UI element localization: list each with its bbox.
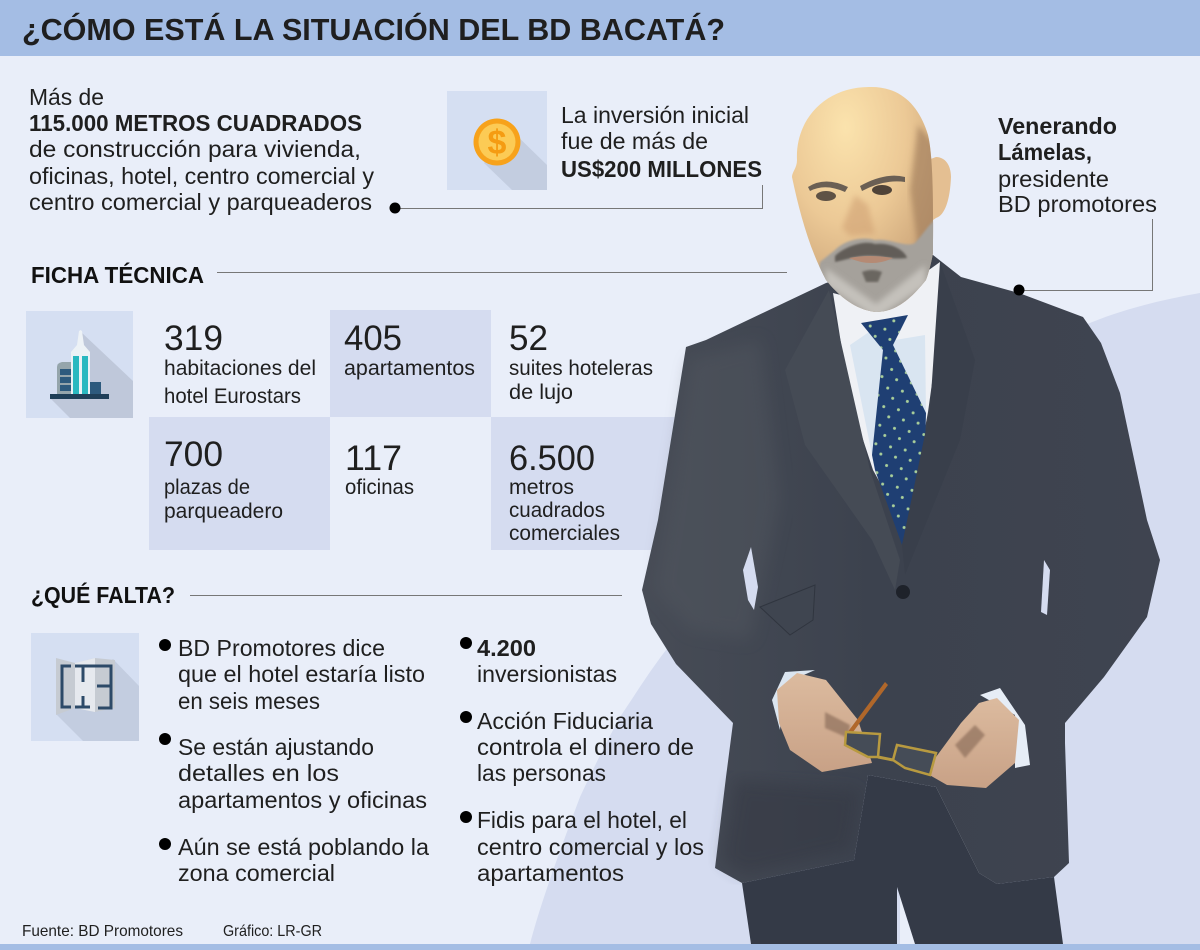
cell: 700 <box>149 417 330 550</box>
background shape: left curve <box>530 600 900 944</box>
text block: construction area <box>29 84 374 215</box>
bullet: fiduciary: Acción Fiduciaria <box>477 708 653 734</box>
title: ¿CÓMO ESTÁ LA SITUACIÓN DEL BD BACATÁ? <box>22 11 725 47</box>
nose <box>842 195 875 236</box>
tie <box>861 315 926 545</box>
text block: initial investment <box>561 102 762 182</box>
title <box>0 0 1200 56</box>
stat: 52 suites: 52 <box>509 319 548 358</box>
cuffs <box>772 670 815 730</box>
stat: 700 parking <box>164 435 283 523</box>
list: right column <box>460 635 704 886</box>
bullet: fidis: centro comercial y los <box>477 834 704 860</box>
icon: building <box>26 311 133 418</box>
bullet: investors: 4.200 <box>477 635 536 661</box>
bullet: hotel: en seis meses <box>178 688 320 714</box>
leader line: investment <box>390 185 762 214</box>
bullet: apartments: apartamentos y oficinas <box>178 787 427 813</box>
text block: construction area: oficinas, hotel, centro comercial y <box>29 163 374 189</box>
lapels <box>785 290 900 590</box>
stat: 52 suites <box>509 319 653 404</box>
bullet: hotel: BD Promotores dice <box>178 635 385 661</box>
bullet: apartments: Se están ajustando <box>178 734 374 760</box>
pocket <box>760 585 815 635</box>
bullet: commercial zone: zona comercial <box>178 860 335 886</box>
heading: qué falta: ¿QUÉ FALTA? <box>31 581 175 608</box>
icon: floor plan <box>31 633 139 741</box>
panel: data grid <box>149 310 681 550</box>
temple shadow <box>908 126 934 241</box>
bullet: investors <box>460 635 617 687</box>
bullet: fiduciary: controla el dinero de <box>477 734 694 760</box>
stat: 6.500 square metres: cuadrados <box>509 499 605 522</box>
shirt shadow <box>850 330 926 520</box>
stat: 52 suites: suites hoteleras <box>509 357 653 380</box>
heading: ficha técnica: FICHA TÉCNICA <box>31 261 204 288</box>
cell: 6.500 <box>491 417 681 550</box>
stat: 6.500 square metres: comerciales <box>509 522 620 545</box>
bullet: fidis <box>460 807 704 886</box>
glasses <box>845 682 936 775</box>
text block: initial investment: La inversión inicial <box>561 102 749 128</box>
bullet: fiduciary <box>460 708 694 786</box>
stat: 700 parking: 700 <box>164 435 223 474</box>
bullet: commercial zone <box>159 834 429 886</box>
bullet: fidis: Fidis para el hotel, el <box>477 807 687 833</box>
head <box>792 87 951 320</box>
stat: 319 rooms <box>164 319 316 408</box>
bullet: apartments: detalles en los <box>178 760 339 786</box>
leader line: portrait <box>1014 219 1152 296</box>
bullet: commercial zone: Aún se está poblando la <box>178 834 429 860</box>
hands <box>777 673 1019 788</box>
bullet: fiduciary: las personas <box>477 760 606 786</box>
stat: 52 suites: de lujo <box>509 381 573 404</box>
stat: 405 apartments <box>344 319 475 380</box>
arm gaps <box>743 547 758 610</box>
footer: source: Fuente: BD Promotores <box>22 923 183 940</box>
stat: 6.500 square metres: 6.500 <box>509 439 595 478</box>
stat: 700 parking: parqueadero <box>164 500 283 523</box>
list: left column <box>159 635 429 886</box>
beard <box>818 220 933 312</box>
stat: 117 offices <box>345 439 414 499</box>
bullet: hotel <box>159 635 425 714</box>
caption: Venerando Lámelas: presidente <box>998 166 1109 192</box>
eyes <box>816 191 836 201</box>
shirt <box>833 262 940 530</box>
stat: 6.500 square metres <box>509 439 620 545</box>
eyebrows <box>808 182 848 192</box>
stat: 6.500 square metres: metros <box>509 476 574 499</box>
icon: dollar coin <box>447 91 547 190</box>
trousers <box>742 775 1063 944</box>
caption: Venerando Lámelas: BD promotores <box>998 191 1157 217</box>
text block: construction area: Más de <box>29 84 104 110</box>
bullet: investors: inversionistas <box>477 661 617 687</box>
portrait: man in suit <box>642 87 1160 944</box>
icon: dollar coin: $ <box>488 124 507 162</box>
stat: 700 parking: plazas de <box>164 476 250 499</box>
text block: construction area: de construcción para vivienda, <box>29 136 361 162</box>
caption: Venerando Lámelas: Venerando <box>998 113 1117 139</box>
background shape: right curve <box>1000 293 1200 944</box>
bullet: fidis: apartamentos <box>477 860 624 886</box>
text block: construction area: centro comercial y parqueaderos <box>29 189 372 215</box>
stat: 319 rooms: 319 <box>164 319 223 358</box>
bullet: hotel: que el hotel estaría listo <box>178 661 425 687</box>
stat: 117 offices: 117 <box>345 439 402 478</box>
cell: 405 <box>330 310 491 417</box>
footer: credit: Gráfico: LR-GR <box>223 923 322 940</box>
bottom band <box>0 944 1200 950</box>
stat: 319 rooms: hotel Eurostars <box>164 385 301 408</box>
jacket <box>642 255 1160 884</box>
stat: 405 apartments: 405 <box>344 319 402 358</box>
caption: Venerando Lámelas <box>998 113 1157 217</box>
text block: initial investment: fue de más de <box>561 128 708 154</box>
text block: construction area: 115.000 METROS CUADRADOS <box>29 110 362 136</box>
stat: 405 apartments: apartamentos <box>344 357 475 380</box>
caption: Venerando Lámelas: Lámelas, <box>998 139 1092 165</box>
text block: initial investment: US$200 MILLONES <box>561 156 762 182</box>
bullet: apartments <box>159 733 427 813</box>
stat: 319 rooms: habitaciones del <box>164 357 316 380</box>
button <box>896 585 910 599</box>
stat: 117 offices: oficinas <box>345 476 414 499</box>
